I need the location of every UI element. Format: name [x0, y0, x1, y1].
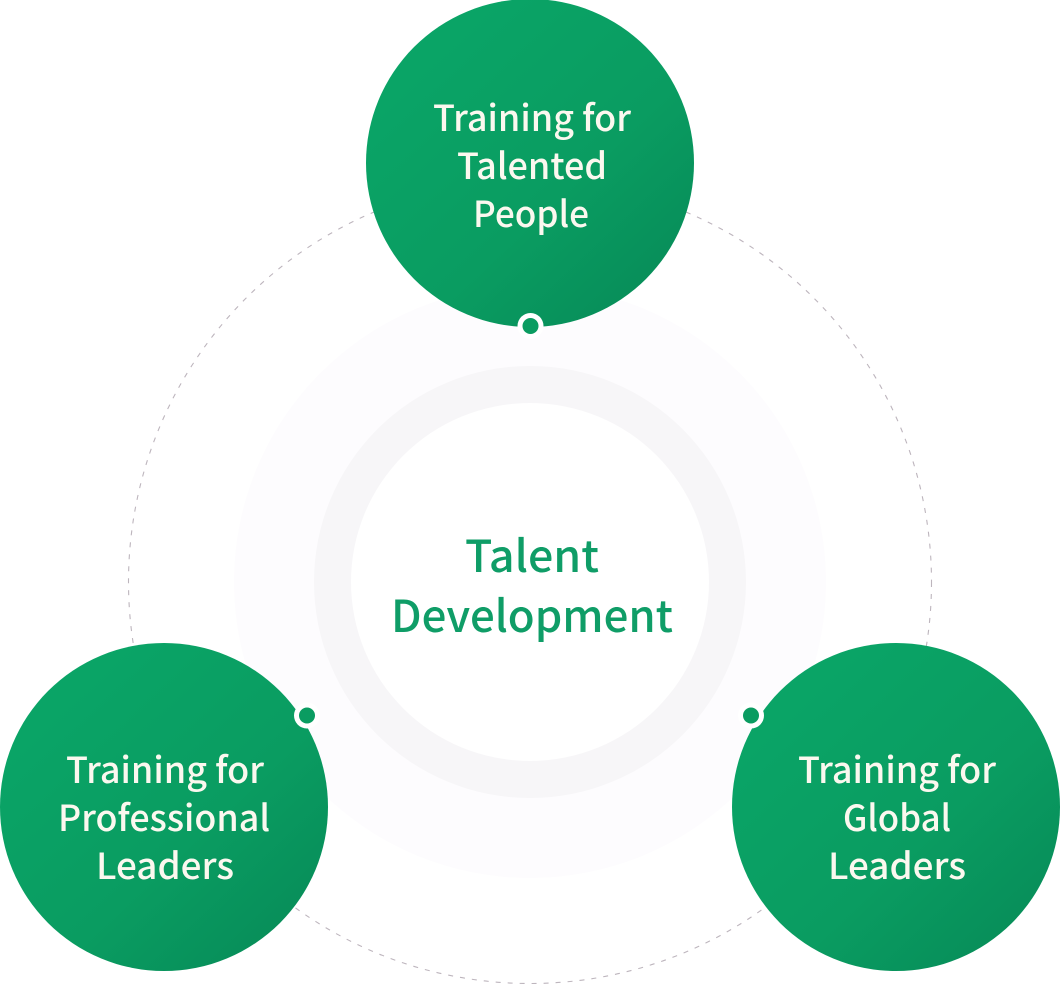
- circle: Training for Global Leaders: Leaders: [828, 838, 966, 890]
- circle: Training for Talented People: People: [473, 186, 589, 238]
- circle: Training for Talented People: Talented: [457, 138, 607, 190]
- central rings: [234, 286, 826, 878]
- circle: Training for Talented People: [366, 0, 694, 327]
- connector dot: right: [738, 702, 764, 728]
- connector dot: left: [294, 702, 320, 728]
- circle: Training for Global Leaders: Global: [843, 790, 951, 842]
- dashed orbit ring: [128, 180, 932, 984]
- center title: Development: [391, 581, 673, 645]
- circle: Training for Professional Leaders: [0, 643, 328, 971]
- center title: Talent: [465, 521, 599, 585]
- circle: Training for Global Leaders: Training for: [798, 742, 996, 794]
- circle: Training for Professional Leaders: Leaders: [96, 838, 234, 890]
- connector dot: top: [518, 313, 544, 339]
- circle: Training for Professional Leaders: Training for: [66, 742, 264, 794]
- circle: Training for Global Leaders: [732, 643, 1060, 971]
- circle: Training for Professional Leaders: Professional: [58, 790, 270, 842]
- circle: Training for Talented People: Training for: [433, 90, 631, 142]
- center title: [391, 521, 673, 645]
